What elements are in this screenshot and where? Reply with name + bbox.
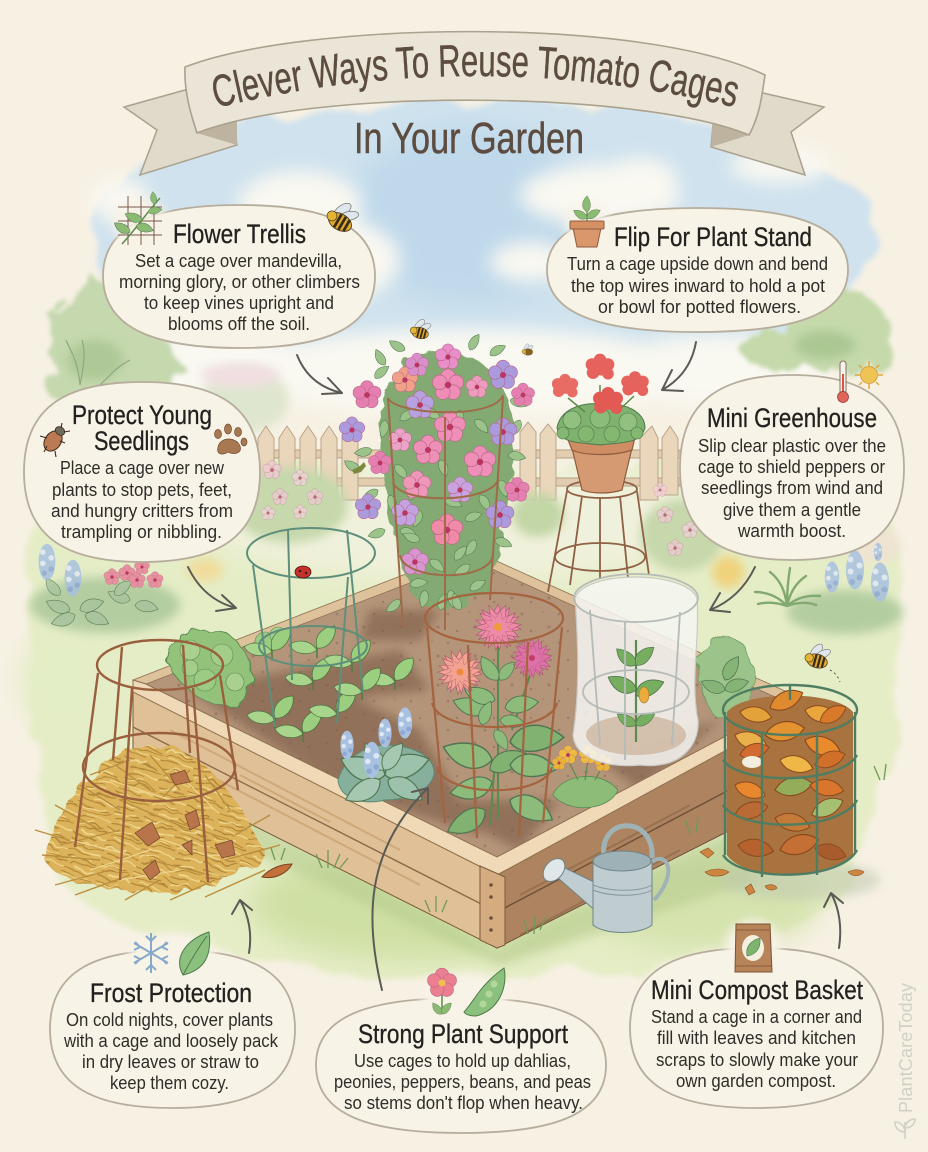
callout: Protect Young Seedlings xyxy=(24,382,260,562)
watermark: PlantCareToday xyxy=(896,983,916,1113)
callout: Flower Trellis xyxy=(103,191,375,348)
body text: Slip clear plastic over the xyxy=(698,435,886,456)
flowers xyxy=(432,369,464,399)
body text: warmth boost. xyxy=(737,520,846,541)
background trees right xyxy=(742,288,892,373)
body text: On cold nights, cover plants xyxy=(66,1009,273,1030)
pink shrubs behind fence xyxy=(232,460,724,571)
leaves xyxy=(342,332,529,615)
yellow flowers xyxy=(552,745,618,808)
body text: Use cages to hold up dahlias, xyxy=(354,1050,571,1071)
compost basket xyxy=(700,685,880,900)
heading: Strong Plant Support xyxy=(358,1019,568,1049)
trellis with climbing flowers xyxy=(339,332,535,630)
arrow: seedlings xyxy=(188,567,236,611)
icon: snowflake and leaf xyxy=(128,932,216,977)
title banner xyxy=(122,30,826,176)
heading: Mini Greenhouse xyxy=(707,403,877,433)
body text: blooms off the soil. xyxy=(168,313,310,334)
straw frost cage xyxy=(75,640,238,882)
plant stand xyxy=(548,480,649,592)
body text: with a cage and loosely pack xyxy=(63,1030,279,1051)
clouds xyxy=(90,147,830,416)
body text xyxy=(63,1009,279,1093)
body text: so stems don't flop when heavy. xyxy=(344,1092,583,1113)
body text: give them a gentle xyxy=(723,499,861,520)
background trees left xyxy=(44,282,289,432)
watering can xyxy=(539,826,668,932)
body text: cage to shield peppers or xyxy=(698,456,885,477)
body text: or bowl for potted flowers. xyxy=(598,296,801,317)
body text: own garden compost. xyxy=(676,1070,836,1091)
arrow: plant stand xyxy=(662,342,696,391)
body text: the top wires inward to hold a pot xyxy=(571,275,825,296)
left face xyxy=(133,690,497,948)
grass tufts xyxy=(271,764,886,934)
body text: plants to stop pets, feet, xyxy=(52,479,232,500)
body text: Stand a cage in a corner and xyxy=(651,1006,862,1027)
icon: potted plant xyxy=(565,196,609,249)
curved title text: Clever Ways To Reuse Tomato Cages xyxy=(213,45,738,108)
body text: Set a cage over mandevilla, xyxy=(135,250,342,271)
body text: trampling or nibbling. xyxy=(61,521,222,542)
ladybug xyxy=(295,566,311,578)
heading: Mini Compost Basket xyxy=(651,975,863,1005)
arrow: greenhouse xyxy=(710,567,755,612)
body text xyxy=(651,1006,862,1091)
plastic covered cage with pepper plant xyxy=(573,574,698,766)
seedlings and lettuce xyxy=(168,626,413,742)
dry leaves in straw xyxy=(135,770,235,880)
arrow: compost xyxy=(824,893,843,948)
heading: Seedlings xyxy=(94,426,189,456)
callout: Frost Protection xyxy=(50,932,295,1108)
rim xyxy=(133,680,800,875)
body text xyxy=(334,1050,591,1113)
ribbon fold shadows xyxy=(197,118,749,147)
body text: peonies, peppers, beans, and peas xyxy=(334,1071,591,1092)
red blooms xyxy=(586,354,614,380)
geranium on plant stand xyxy=(548,354,649,592)
corner post xyxy=(480,866,505,948)
blue flower plant xyxy=(337,707,434,809)
body text: and hungry critters from xyxy=(51,500,233,521)
green seedling cage xyxy=(247,528,375,727)
soil xyxy=(140,555,795,858)
herb plant xyxy=(699,636,754,720)
body text: scraps to slowly make your xyxy=(656,1049,858,1070)
heading: Flower Trellis xyxy=(173,219,306,249)
straw mulch pile xyxy=(35,745,292,900)
pot xyxy=(572,448,632,493)
heading: Flip For Plant Stand xyxy=(614,222,812,252)
foliage xyxy=(557,404,645,445)
sky watercolor wash xyxy=(90,100,872,416)
callout: Mini Greenhouse xyxy=(680,361,904,560)
left flower border xyxy=(30,544,223,633)
body text: fill with leaves and kitchen xyxy=(657,1027,856,1048)
icon: paw print xyxy=(214,424,247,454)
left ribbon tail xyxy=(124,90,237,175)
body text: seedlings from wind and xyxy=(701,477,883,498)
right face xyxy=(497,712,790,948)
body text: Turn a cage upside down and bend xyxy=(567,253,828,274)
copper flower cage xyxy=(425,593,563,838)
icon: bee xyxy=(323,195,364,237)
copper cage xyxy=(388,395,503,630)
body text: in dry leaves or straw to xyxy=(82,1051,259,1072)
heading: Protect Young xyxy=(72,400,212,430)
body text: Place a cage over new xyxy=(60,457,225,478)
icon: compost bag xyxy=(725,920,781,976)
body text xyxy=(51,457,233,542)
raised garden bed xyxy=(133,549,805,965)
icon: thermometer and sun xyxy=(838,361,883,402)
subtitle: In Your Garden xyxy=(354,114,584,163)
arrow: support xyxy=(372,788,428,990)
garden ground wash xyxy=(20,454,901,985)
dahlias in copper cage xyxy=(433,598,565,842)
icon: flower and pea pod xyxy=(421,968,509,1020)
icon: vine trellis xyxy=(112,191,168,246)
body text xyxy=(698,435,886,541)
fence xyxy=(258,422,680,500)
shadow under bed xyxy=(200,810,760,965)
arrow: trellis xyxy=(297,355,342,394)
fallen leaf xyxy=(262,864,292,878)
small bees and insects xyxy=(352,316,840,682)
callout: Mini Compost Basket xyxy=(630,920,883,1108)
body text: keep them cozy. xyxy=(110,1072,229,1093)
arrow: frost xyxy=(232,900,252,953)
body text xyxy=(567,253,828,317)
body text: to keep vines upright and xyxy=(144,292,334,313)
icon: beetle xyxy=(40,423,70,457)
right flower border xyxy=(712,527,903,634)
body text: morning glory, or other climbers xyxy=(119,271,360,292)
heading: Frost Protection xyxy=(90,978,252,1008)
heading xyxy=(72,400,212,456)
right ribbon tail xyxy=(711,93,824,175)
callout: Flip For Plant Stand xyxy=(547,196,848,332)
body text xyxy=(119,250,360,334)
main band xyxy=(185,32,765,135)
callout: Strong Plant Support xyxy=(316,968,606,1133)
back rim xyxy=(133,549,475,684)
